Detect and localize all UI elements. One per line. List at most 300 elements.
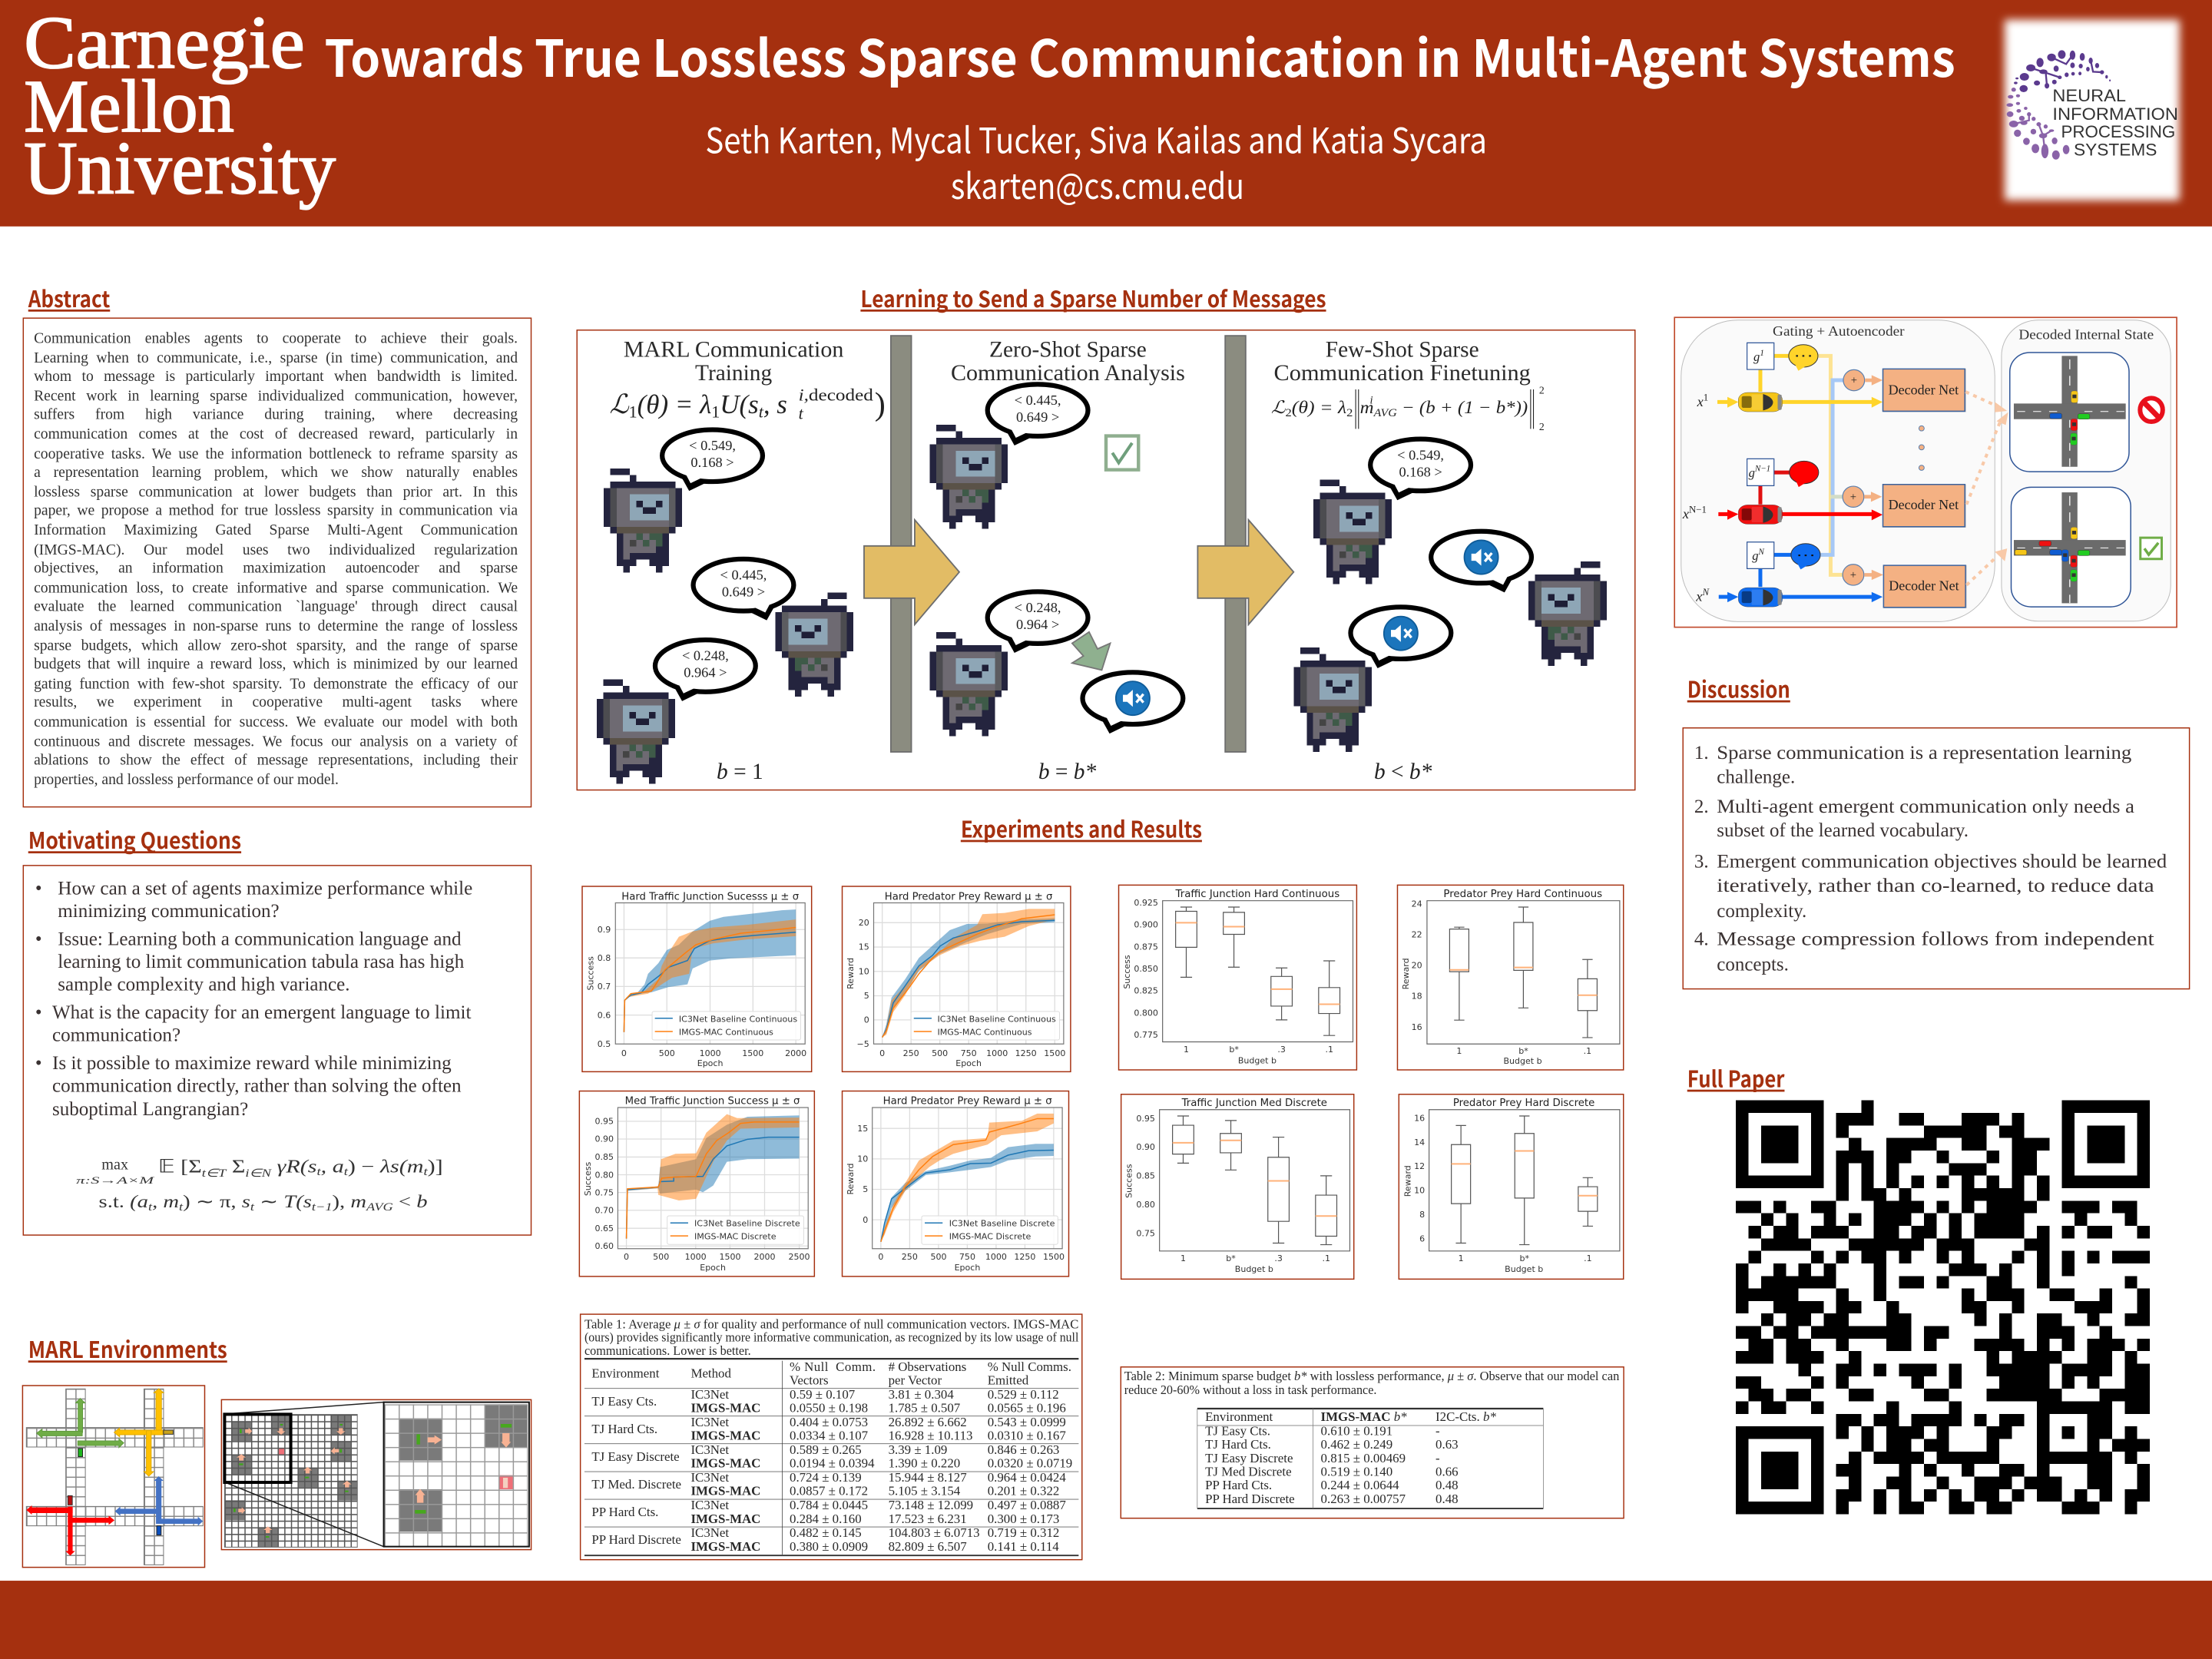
boxplot: Traffic Junction Hard Continuous: 0.850 (1134, 964, 1158, 974)
logo: Carnegie Mellon University: Mellon (24, 65, 234, 148)
table 2 cells: PP Hard Discrete (1205, 1492, 1295, 1506)
chart: Hard Predator Prey Reward discrete: 0 (863, 1215, 868, 1225)
boxplot: Predator Prey Hard Discrete: Predator Prey Hard Discrete (1453, 1098, 1594, 1109)
table 2 cells (1205, 1409, 1496, 1506)
table 1 rows: IMGS-MAC (690, 1455, 760, 1470)
table 1 rows: 3.81 ± 0.304 (889, 1387, 954, 1402)
logo: NeurIPS: NEURAL (2052, 86, 2126, 105)
chart: Hard Predator Prey Reward continuous: 15 (859, 942, 869, 952)
chart: Hard Traffic Junction Success: 0.9 (598, 925, 611, 935)
panel: discussion: iteratively, rather than co-learned, to reduce data (1717, 876, 2154, 896)
chart: Hard Predator Prey Reward continuous: IMGS-MAC Continuous (938, 1028, 1032, 1038)
boxplot: Traffic Junction Hard Continuous: 0.800 (1134, 1008, 1158, 1018)
table 1 header: per Vector (889, 1373, 942, 1387)
chart: Hard Predator Prey Reward discrete: 1250 (1014, 1252, 1035, 1262)
table 1 rows: IC3Net (690, 1470, 729, 1485)
table 1 rows: 0.0310 ± 0.167 (988, 1428, 1066, 1442)
panel: abstract: lossless sparse communication at lower budgets than prior art. In this (34, 484, 518, 501)
equation L2: i (1369, 394, 1373, 406)
bullet list: • (35, 1053, 42, 1074)
chart: Med Traffic Junction Success (579, 1091, 814, 1277)
arrow 1 (864, 520, 959, 624)
chart: Med Traffic Junction Success: 1500 (719, 1252, 741, 1262)
table 2 cells: 0.519 ± 0.140 (1321, 1465, 1392, 1479)
equation: t (148, 1201, 153, 1214)
chart: Hard Traffic Junction Success: Epoch (697, 1058, 723, 1068)
icon: green arrow (1072, 632, 1111, 670)
boxplot: Predator Prey Hard Discrete: 14 (1414, 1137, 1425, 1147)
chart: Med Traffic Junction Success: 2000 (753, 1252, 776, 1262)
bullet list: • (35, 1002, 42, 1023)
labels: diagram text (1682, 323, 2154, 604)
table 1 rows: 0.964 ± 0.0424 (988, 1470, 1066, 1485)
table 2 cells: TJ Med Discrete (1205, 1465, 1292, 1479)
chart: Med Traffic Junction Success: 0.70 (594, 1205, 614, 1215)
equation: m (350, 1192, 366, 1211)
title: Towards True Lossless Sparse Communication in Multi-Agent Systems (324, 18, 1955, 92)
labels: budget (717, 760, 1432, 784)
robot agents and messages, phase 1: < 0.248, (682, 648, 729, 664)
logo: NeurIPS: INFORMATION (2052, 104, 2178, 124)
labels: diagram text: + (1850, 491, 1856, 503)
table 1 rows: IMGS-MAC (690, 1428, 760, 1442)
labels: diagram text: x (1696, 588, 1702, 604)
chart: Hard Predator Prey Reward discrete (843, 1091, 1069, 1277)
chart: Hard Predator Prey Reward continuous: 20 (859, 918, 869, 928)
panel: discussion: subset of the learned vocabulary. (1717, 820, 1969, 841)
table 2 caption (1124, 1369, 1620, 1397)
bullet list: communication? (52, 1025, 180, 1046)
labels: diagram text: g (1753, 349, 1760, 364)
boxplot: Predator Prey Hard Continuous: 20 (1412, 961, 1422, 971)
chart: Hard Traffic Junction Success: 0.5 (598, 1039, 611, 1049)
table 1 rows: 17.523 ± 6.231 (889, 1512, 967, 1526)
panel: abstract: communication is essential for success. We evaluate our model with both (34, 714, 518, 730)
table 1 rows: 0.284 ± 0.160 (790, 1512, 862, 1526)
table 1 rows: IC3Net (690, 1387, 729, 1402)
chart: Hard Predator Prey Reward discrete: 1500 (1043, 1252, 1065, 1262)
panel: discussion: challenge. (1717, 767, 1795, 787)
boxplot: Traffic Junction Med Discrete: 0.95 (1136, 1114, 1155, 1124)
icon: no sign (2140, 398, 2163, 422)
bullet list: suboptimal Langrangian? (52, 1099, 248, 1120)
table 1 header: Environment (591, 1366, 660, 1380)
panel: abstract: continuous and discrete messages. We focus our analysis on a variety of (34, 733, 518, 750)
boxplot: Predator Prey Hard Continuous: 16 (1412, 1022, 1422, 1032)
table 2 cells: TJ Easy Discrete (1205, 1451, 1293, 1465)
table 1 rows: 0.141 ± 0.114 (988, 1539, 1059, 1554)
boxplot: Traffic Junction Med Discrete: b* (1226, 1253, 1236, 1263)
chart: Med Traffic Junction Success: 0.80 (594, 1170, 614, 1180)
labels: diagram text: Decoder Net (1889, 497, 1959, 512)
table 1 rows: 0.59 ± 0.107 (790, 1387, 855, 1402)
boxplot: Traffic Junction Med Discrete: Success (1124, 1164, 1134, 1198)
table 1 header: Vectors (790, 1373, 829, 1387)
arrow 2 (1197, 520, 1293, 624)
bullet list (35, 878, 472, 1120)
table 1 rows: 15.944 ± 8.127 (889, 1470, 967, 1485)
equation: )] (428, 1157, 443, 1177)
chart: Hard Predator Prey Reward discrete: 10 (857, 1154, 868, 1164)
robot agents and messages, phase 1 (597, 429, 853, 783)
boxplot: Traffic Junction Hard Continuous: .1 (1325, 1045, 1333, 1055)
panel: abstract (23, 318, 531, 807)
arrows: yellow agent (114, 1389, 173, 1476)
panel: abstract: a representation learning problem, which we show naturally enables (34, 465, 518, 482)
boxplot: Predator Prey Hard Discrete: b* (1520, 1253, 1530, 1263)
table 1 header: Method (690, 1366, 732, 1380)
table 1 rows: 0.529 ± 0.112 (988, 1387, 1059, 1402)
table 1 rows: 0.543 ± 0.0999 (988, 1415, 1066, 1429)
chart: Med Traffic Junction Success: 0.65 (594, 1224, 614, 1233)
panel: abstract: Communication enables agents to cooperate to achieve their goals. (34, 330, 518, 347)
panel: abstract: Recent work in learning sparse individualized communication, however, (34, 388, 518, 405)
boxplot: Traffic Junction Med Discrete: 0.80 (1136, 1200, 1155, 1210)
chart: Med Traffic Junction Success: 0.85 (594, 1152, 614, 1162)
table 2 cells: 0.48 (1435, 1478, 1459, 1492)
chart: Hard Predator Prey Reward discrete: Epoch (955, 1263, 980, 1273)
table 1 rows: PP Hard Discrete (591, 1532, 681, 1547)
intersection panel bottom (2011, 487, 2131, 607)
table 1 rows: 16.928 ± 10.113 (889, 1428, 972, 1442)
chart: Hard Traffic Junction Success: 0 (621, 1048, 627, 1058)
table 1 caption (584, 1316, 1079, 1358)
header band (0, 0, 2212, 227)
equation L2 (1271, 384, 1545, 432)
table 1 rows: IC3Net (690, 1525, 729, 1540)
equation: 𝔼 [Σ (158, 1157, 193, 1177)
boxplot: Predator Prey Hard Continuous: Predator Prey Hard Continuous (1443, 889, 1602, 900)
boxplot: Predator Prey Hard Discrete: Budget b (1505, 1264, 1543, 1274)
table 2 cells: 0.244 ± 0.0644 (1321, 1478, 1399, 1492)
chart: Hard Traffic Junction Success: 1000 (700, 1048, 721, 1058)
panel: gating autoencoder diagram (1674, 317, 2177, 628)
chart: Hard Traffic Junction Success: 500 (659, 1048, 675, 1058)
equation L1: U(s (720, 389, 759, 419)
road grid (26, 1389, 203, 1565)
robot agents and messages, phase 2: 0.649 > (1016, 409, 1059, 425)
table 2 cells: 0.815 ± 0.00469 (1321, 1451, 1406, 1465)
zoom callout lines (225, 1402, 384, 1547)
boxplot: Traffic Junction Hard Continuous (1119, 885, 1356, 1070)
table 1 header (591, 1359, 1071, 1387)
boxplot: Traffic Junction Med Discrete: .3 (1274, 1253, 1283, 1263)
labels: diagram text: N (1701, 587, 1710, 598)
chart: Med Traffic Junction Success: IMGS-MAC Discrete (694, 1231, 777, 1241)
equation: t−1 (312, 1201, 333, 1214)
heading: Zero-Shot (951, 338, 1185, 386)
bullet list: How can a set of agents maximize performance while (58, 878, 472, 899)
chart: Hard Predator Prey Reward discrete: IMGS-MAC Discrete (949, 1231, 1031, 1241)
robot agents and messages, phase 2: < 0.445, (1015, 392, 1061, 408)
table 2 cells: TJ Easy Cts. (1205, 1423, 1270, 1438)
table 2 cells: PP Hard Cts. (1205, 1478, 1272, 1492)
boxplot: Traffic Junction Hard Continuous: 0.900 (1134, 919, 1158, 929)
table 1 rows: 0.0320 ± 0.0719 (988, 1455, 1072, 1470)
chart: Hard Traffic Junction Success: 1500 (742, 1048, 763, 1058)
heading: MARL Environments: MARL Environments (28, 1333, 227, 1365)
boxplot: Predator Prey Hard Continuous: .1 (1584, 1046, 1591, 1056)
bullet list: sample complexity and high variance. (58, 974, 350, 995)
chart: Hard Predator Prey Reward continuous (843, 886, 1071, 1071)
dotted arrows (1965, 392, 2000, 585)
chart: Hard Traffic Junction Success: Hard Traffic Junction Sucesss μ ± σ (621, 891, 799, 902)
panel: discussion: Sparse communication is a representation learning (1717, 743, 2132, 763)
boxplot: Traffic Junction Med Discrete: .1 (1322, 1253, 1330, 1263)
robot agents and messages, phase 1: 0.964 > (684, 665, 727, 680)
boxplot: Traffic Junction Hard Continuous: Success (1122, 955, 1132, 989)
chart: Med Traffic Junction Success: 0 (624, 1252, 629, 1262)
bullet list: What is the capacity for an emergent language to limit (52, 1002, 472, 1023)
agent N row (1719, 542, 1883, 607)
shared message bus (1818, 356, 1843, 575)
icon: check mark (2141, 538, 2162, 559)
bullet list: • (35, 878, 42, 899)
panel: abstract: communication comes at the cost of decreased reward, particularly in (34, 426, 518, 443)
intersection panel top (2010, 353, 2129, 472)
table 1 rows: 0.724 ± 0.139 (790, 1470, 862, 1485)
boxplot: Predator Prey Hard Discrete (1399, 1094, 1624, 1279)
boxplot: Traffic Junction Hard Continuous: 0.775 (1134, 1030, 1158, 1040)
table 2 cells: I2C-Cts. b* (1435, 1409, 1496, 1424)
equation: t (250, 1201, 255, 1214)
equation L2: − (b + (1 − b*)) (1397, 398, 1528, 417)
table 1 rows: 1.785 ± 0.507 (889, 1400, 960, 1415)
table 2 cells: - (1435, 1451, 1440, 1465)
boxplot: Predator Prey Hard Discrete: .1 (1584, 1253, 1592, 1263)
boxplot: Traffic Junction Hard Continuous: 0.875 (1134, 942, 1158, 952)
table 1 rows: TJ Med. Discrete (591, 1477, 681, 1492)
agent 1 row (1717, 343, 1883, 412)
panel: abstract: cooperative tasks. We use the information bottleneck to reframe sparsity as (34, 445, 518, 462)
labels: diagram text: g (1752, 548, 1758, 563)
equation L1: ) (875, 386, 886, 422)
bullet list: • (35, 929, 42, 950)
equation: t (317, 1166, 322, 1178)
chart: Hard Traffic Junction Success: 2000 (785, 1048, 806, 1058)
boxplot: Predator Prey Hard Continuous: 24 (1412, 899, 1422, 909)
table 2 cells: 0.63 (1435, 1437, 1459, 1452)
equation: ), (333, 1192, 350, 1211)
equation L1: t (799, 404, 804, 423)
panel: motivating questions (23, 866, 531, 1235)
chart: Hard Traffic Junction Success: 0.6 (598, 1010, 611, 1020)
table 2 cells: IMGS-MAC b* (1321, 1409, 1407, 1424)
chart: Hard Predator Prey Reward continuous: 750 (961, 1048, 977, 1058)
chart: Hard Predator Prey Reward continuous: IC3Net Baseline Continuous (938, 1015, 1056, 1025)
equation: ) − (348, 1157, 380, 1177)
table 1 rows: 0.784 ± 0.0445 (790, 1498, 868, 1512)
boxplot: Predator Prey Hard Discrete: Reward (1403, 1165, 1413, 1197)
panel: abstract: whom to message is particularly important when bandwidth is limited. (34, 369, 518, 386)
chart: Hard Predator Prey Reward continuous: Epoch (955, 1058, 982, 1068)
equation: t (179, 1201, 184, 1214)
table 1 rows: 0.497 ± 0.0887 (988, 1498, 1066, 1512)
chart: Hard Predator Prey Reward discrete: 750 (959, 1252, 975, 1262)
equation L1: i,decoded (799, 386, 873, 405)
heading: Motivating Questions: Motivating Questions (28, 823, 241, 856)
boxplot: Traffic Junction Hard Continuous: 1 (1184, 1045, 1189, 1055)
boxplot: Predator Prey Hard Discrete: 10 (1414, 1186, 1425, 1196)
panel: abstract: budgets that will inquire a reward loss, which is minimized by our learned (34, 656, 518, 673)
equation: Σ (226, 1157, 245, 1177)
logo: Carnegie Mellon University: University (24, 127, 336, 210)
chart: Hard Predator Prey Reward continuous: 0 (879, 1048, 885, 1058)
table 1 rows: 0.201 ± 0.322 (988, 1483, 1059, 1498)
equation: , m (152, 1192, 179, 1211)
table 1 rows: 0.0194 ± 0.0394 (790, 1455, 875, 1470)
table 1 rows: 1.390 ± 0.220 (889, 1455, 960, 1470)
equation L2: (θ) = λ (1292, 398, 1346, 417)
robot agents and messages, phase 2 (929, 384, 1183, 737)
chart: Hard Predator Prey Reward discrete: 1000 (985, 1252, 1007, 1262)
robot agents and messages, phase 1: < 0.445, (720, 567, 767, 582)
heading: Few-Shot: Few-Shot Sparse (1326, 338, 1479, 363)
labels: diagram text: Decoded Internal State (2018, 327, 2154, 343)
equation L2: 2 (1286, 407, 1292, 419)
plus nodes (1843, 369, 1865, 585)
table 1 rows: TJ Hard Cts. (591, 1422, 657, 1436)
table 1 rows: TJ Easy Discrete (591, 1449, 680, 1464)
agent N-1 row (1718, 459, 1883, 524)
panel: abstract: suffers from high variance during training, where decreasing (34, 407, 518, 424)
panel: discussion: Multi-agent emergent communication only needs a (1717, 796, 2134, 817)
equation: λs(m (379, 1157, 424, 1177)
table 1 rows: IMGS-MAC (690, 1483, 760, 1498)
chart: Hard Traffic Junction Success: IC3Net Baseline Continuous (679, 1015, 797, 1025)
logo: NeurIPS: PROCESSING (2061, 122, 2175, 141)
heading: Zero-Shot: Zero-Shot Sparse (989, 338, 1147, 363)
table 1 rows: PP Hard Cts. (591, 1505, 658, 1519)
panel: discussion: Emergent communication objectives should be learned (1717, 852, 2167, 873)
boxplot: Predator Prey Hard Continuous: 22 (1412, 930, 1422, 940)
table 1 rows: IC3Net (690, 1442, 729, 1457)
logo: Carnegie Mellon University: Carnegie (24, 2, 305, 84)
logo: NeurIPS: SYSTEMS (2074, 140, 2157, 159)
equation L1: t (759, 402, 764, 422)
panel: abstract: Learning when to communicate, i.e., sparse (in time) communication, and (34, 349, 518, 366)
table 2 cells: 0.462 ± 0.249 (1321, 1437, 1392, 1452)
panel: abstract: Information Maximizing Gated Sparse Multi-Agent Communication (34, 522, 518, 539)
boxplot: Traffic Junction Hard Continuous: Traffic Junction Hard Continuous (1175, 889, 1339, 900)
panel: discussion (1683, 728, 2190, 989)
table 1 rows: IMGS-MAC (690, 1539, 760, 1554)
panel: discussion: 2. (1694, 796, 1709, 817)
chart: Hard Traffic Junction Success: 0.8 (598, 953, 611, 963)
logo: Carnegie Mellon University (24, 2, 336, 210)
labels: diagram text: 1 (1704, 392, 1708, 403)
chart: Hard Predator Prey Reward discrete: 5 (863, 1184, 868, 1194)
panel: sparse messages diagram (577, 330, 1635, 790)
panel: abstract: properties, and lossless performance of our model. (34, 771, 339, 788)
equation L1: , s (763, 389, 787, 419)
table 1 caption: (ours) provides significantly more informative communication, as recognized by its low usage of null (584, 1330, 1079, 1345)
boxplot: Predator Prey Hard Continuous: 1 (1456, 1046, 1462, 1056)
boxplot: Traffic Junction Hard Continuous: b* (1229, 1045, 1239, 1055)
equation L1: ℒ (609, 389, 629, 419)
chart: Hard Predator Prey Reward continuous: 0 (864, 1015, 869, 1025)
table 1 header: Emitted (988, 1373, 1029, 1387)
boxplot: Predator Prey Hard Continuous: Reward (1401, 958, 1411, 989)
table 2 cells: 0.66 (1435, 1465, 1459, 1479)
boxplot: Traffic Junction Hard Continuous: 0.925 (1134, 898, 1158, 908)
equation L2: AVG (1373, 407, 1397, 419)
chart: Hard Predator Prey Reward continuous: 1000 (986, 1048, 1008, 1058)
bullet list: minimizing communication? (58, 901, 280, 922)
table 1 rows (591, 1387, 1072, 1554)
panel: abstract: paper, we propose a method for true lossless sparsity in communication via (34, 503, 518, 520)
equation: t (424, 1166, 429, 1178)
equation: AVG (366, 1201, 393, 1214)
heading: Full Paper: Full Paper (1687, 1062, 1785, 1094)
logo: NeurIPS (2005, 20, 2180, 200)
table 1 rows: 82.809 ± 6.507 (889, 1539, 967, 1554)
chart: Hard Predator Prey Reward continuous: 500 (932, 1048, 948, 1058)
equation: < (393, 1192, 416, 1211)
equation: s.t. (a (99, 1192, 144, 1211)
robot agents and messages, phase 3 (1293, 439, 1607, 752)
table 2 rules (1197, 1409, 1543, 1508)
boxplot: Predator Prey Hard Discrete: 1 (1459, 1253, 1464, 1263)
chart: Hard Predator Prey Reward discrete: IC3Net Baseline Discrete (949, 1218, 1055, 1228)
chart: Med Traffic Junction Success: Med Traffic Junction Success μ ± σ (625, 1095, 800, 1107)
labels: diagram text: N (1757, 548, 1764, 557)
chart: Med Traffic Junction Success: IC3Net Baseline Discrete (694, 1218, 800, 1228)
heading: Discussion: Discussion (1687, 673, 1790, 705)
chart: Hard Predator Prey Reward discrete: 15 (857, 1124, 868, 1134)
table 1 rows: 0.404 ± 0.0753 (790, 1415, 868, 1429)
equation L1: (θ) = λ (637, 389, 711, 419)
grey phase divider 1 (891, 336, 912, 752)
chart: Med Traffic Junction Success: 500 (653, 1252, 669, 1262)
bullet list: communication directly, rather than solving the often (52, 1076, 462, 1097)
labels: budget: b < b* (1374, 760, 1432, 784)
boxplot: Traffic Junction Med Discrete: Budget b (1235, 1264, 1273, 1274)
boxplot: Predator Prey Hard Continuous: b* (1518, 1046, 1528, 1056)
table 2 cells: 0.48 (1435, 1492, 1459, 1506)
chart: Hard Traffic Junction Success: 0.7 (598, 982, 611, 992)
equation: , a (321, 1157, 344, 1177)
table 2 cells: TJ Hard Cts. (1205, 1437, 1271, 1452)
email: skarten@cs.cmu.edu (951, 159, 1244, 210)
heading: Zero-Shot: Communication Analysis (951, 361, 1185, 386)
labels: diagram text: + (1851, 375, 1857, 387)
footer band (0, 1581, 2212, 1659)
grey phase divider 2 (1225, 336, 1246, 752)
chart: Hard Predator Prey Reward discrete: 0 (878, 1252, 883, 1262)
equation L1: 1 (711, 402, 720, 422)
table 2 cells: 0.610 ± 0.191 (1321, 1423, 1392, 1438)
equation: T(s (283, 1192, 312, 1211)
table 2 cells: Environment (1205, 1409, 1273, 1424)
panel: discussion: 1. (1694, 743, 1709, 763)
chart: Med Traffic Junction Success: 1000 (685, 1252, 707, 1262)
bullet list: Issue: Learning both a communication language and (58, 929, 462, 950)
panel: predator prey environment (221, 1399, 531, 1550)
ellipsis dots (1919, 426, 1924, 470)
chart: Hard Predator Prey Reward continuous: 1500 (1044, 1048, 1065, 1058)
heading: Abstract: Abstract (28, 282, 110, 314)
table 1 rules (584, 1359, 1078, 1555)
table 1 rows: 0.846 ± 0.263 (988, 1442, 1059, 1457)
equation: t (344, 1166, 349, 1178)
arrows: blue agent (115, 1476, 203, 1535)
labels: budget: b = b* (1038, 760, 1096, 784)
table 1 rows: IMGS-MAC (690, 1400, 760, 1415)
chart: Med Traffic Junction Success: 0.60 (594, 1241, 614, 1251)
equation L2: 2 (1346, 407, 1353, 419)
equation: ∼ (254, 1192, 283, 1211)
